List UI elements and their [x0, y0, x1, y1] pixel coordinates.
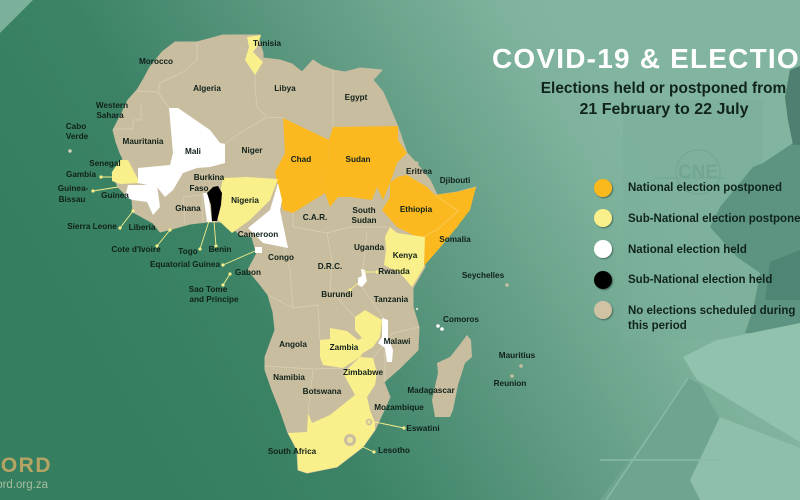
country labels: [58, 39, 536, 456]
country labels: Botswana: [303, 387, 342, 396]
country labels: Chad: [291, 155, 311, 164]
background photo: ballot booth, voter and ballot box: CNE: [678, 162, 718, 183]
Cameroon: national election held: [248, 183, 288, 248]
Senegal: sub-national election postponed: [112, 160, 140, 184]
country labels: Cabo: [66, 122, 86, 131]
legend: sub-national election postponed: [594, 209, 800, 227]
country labels: Togo: [178, 247, 198, 256]
country labels: Liberia: [129, 223, 156, 232]
legend: no elections scheduled: this period: [628, 320, 687, 332]
country labels: Congo: [268, 253, 294, 262]
country labels: Gambia: [66, 170, 96, 179]
Zimbabwe: sub-national election postponed: [343, 357, 377, 397]
country labels: Mozambique: [374, 403, 424, 412]
country labels: Ghana: [175, 204, 201, 213]
subtitle: 21 February to 22 July: [580, 101, 749, 118]
Ethiopia and Somalia: national election postponed: [382, 175, 476, 267]
country labels: Somalia: [439, 235, 471, 244]
subtitle: [541, 80, 786, 118]
country labels: Seychelles: [462, 271, 505, 280]
leader lines: [91, 175, 406, 454]
country labels: Djibouti: [440, 176, 470, 185]
subtitle: Elections held or postponed from: [541, 80, 786, 97]
island nations: [68, 149, 523, 378]
country labels: Uganda: [354, 243, 384, 252]
Comoros: [436, 324, 444, 331]
country labels: Sudan: [351, 216, 377, 225]
country labels: Benin: [209, 245, 231, 254]
Togo: national election held: [203, 193, 212, 222]
legend: no elections scheduled: [594, 301, 795, 332]
country labels: Lesotho: [378, 446, 410, 455]
Guinea: national election held: [125, 185, 160, 215]
country labels: Niger: [242, 146, 263, 155]
Lesotho: [346, 436, 354, 444]
country labels: Tunisia: [253, 39, 281, 48]
country labels: Burkina: [194, 173, 225, 182]
country labels: Morocco: [139, 57, 173, 66]
Malawi: national election held: [378, 318, 393, 362]
country labels: Comoros: [443, 315, 479, 324]
Mali: national election held: [138, 108, 225, 197]
background photo: ballot booth, voter and ballot box: [600, 66, 800, 500]
country labels: Burundi: [321, 290, 353, 299]
country labels: Ethiopia: [400, 205, 433, 214]
legend: sub-national election held: Sub-National election held: [628, 274, 772, 286]
country borders: [113, 42, 419, 413]
Tanzania island: [416, 308, 418, 310]
country labels: Western: [96, 101, 128, 110]
country labels: Zambia: [330, 343, 359, 352]
country labels: Angola: [279, 340, 307, 349]
country labels: Mauritania: [123, 137, 164, 146]
country labels: Madagascar: [407, 386, 455, 395]
country labels: D.R.C.: [318, 262, 342, 271]
Madagascar: [432, 335, 472, 417]
country labels: Guinea-: [58, 184, 89, 193]
Kenya: sub-national election postponed: [384, 227, 425, 287]
country labels: Cote d'Ivoire: [111, 245, 161, 254]
country labels: Eritrea: [406, 167, 432, 176]
country labels: Sierra Leone: [67, 222, 117, 231]
country labels: Sudan: [345, 155, 371, 164]
country labels: Reunion: [494, 379, 526, 388]
country labels: Libya: [274, 84, 296, 93]
Tunisia: sub-national election postponed: [245, 35, 263, 75]
country labels: Kenya: [393, 251, 418, 260]
legend: national election held: National election held: [628, 244, 747, 256]
legend: national election postponed: [594, 179, 782, 197]
country labels: South: [352, 206, 376, 215]
country labels: Egypt: [345, 93, 368, 102]
country labels: Namibia: [273, 373, 305, 382]
Eswatini: [366, 420, 372, 424]
country labels: Mauritius: [499, 351, 536, 360]
legend: national election postponed: National election postponed: [628, 182, 782, 194]
country labels: Gabon: [235, 268, 261, 277]
Benin: sub-national election held: [207, 186, 222, 221]
country labels: Equatorial Guinea: [150, 260, 220, 269]
country labels: Sao Tome: [189, 285, 228, 294]
country labels: Tanzania: [374, 295, 409, 304]
country labels: Bissau: [59, 195, 85, 204]
legend: sub-national election held: [594, 271, 772, 289]
country labels: Malawi: [384, 337, 410, 346]
base landmass: no elections scheduled: [112, 35, 476, 473]
country labels: South Africa: [268, 447, 317, 456]
legend: [594, 179, 800, 332]
map of Africa: [68, 35, 523, 473]
Equatorial Guinea: national election held: [255, 247, 262, 253]
corner triangle: [0, 0, 33, 33]
country labels: Algeria: [193, 84, 221, 93]
country labels: Guinea: [101, 191, 129, 200]
country labels: Rwanda: [378, 267, 410, 276]
Zambia: sub-national election postponed: [320, 310, 382, 368]
South Africa: sub-national election postponed: [288, 395, 375, 473]
country labels: Nigeria: [231, 196, 259, 205]
country labels: Verde: [66, 132, 89, 141]
country labels: C.A.R.: [303, 213, 327, 222]
Rwanda and Burundi: national election held: [358, 269, 367, 287]
country labels: Sahara: [96, 111, 124, 120]
legend: no elections scheduled: No elections scheduled during: [628, 305, 795, 317]
country labels: Cameroon: [238, 230, 278, 239]
logo: ACCORD wordmark and website: [0, 454, 52, 491]
country labels: Zimbabwe: [343, 368, 383, 377]
Chad: national election postponed: [275, 118, 329, 213]
country labels: Faso: [189, 184, 209, 193]
country labels: Senegal: [89, 159, 121, 168]
Sudan: national election postponed: [320, 126, 407, 207]
country labels: and Principe: [189, 295, 239, 304]
legend: national election held: [594, 240, 747, 258]
country labels: Eswatini: [406, 424, 440, 433]
country labels: Mali: [185, 147, 201, 156]
Nigeria: sub-national election postponed: [217, 177, 278, 233]
